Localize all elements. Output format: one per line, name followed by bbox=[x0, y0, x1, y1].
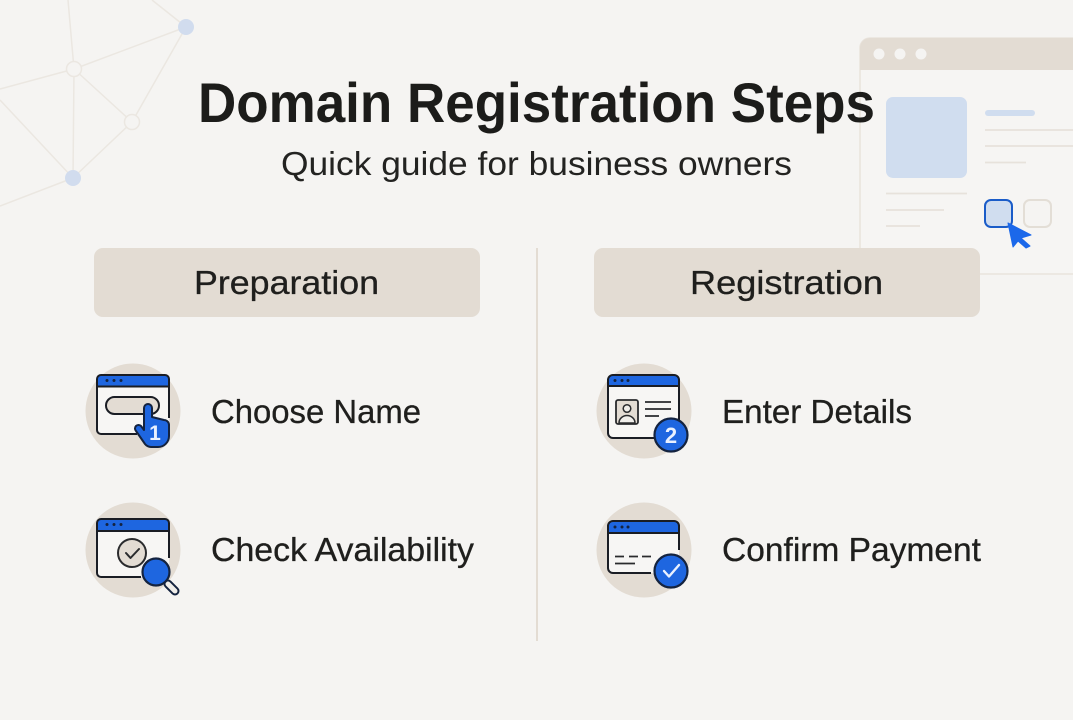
icon: browser with profile card and badge 2 bbox=[596, 364, 692, 458]
title: Domain Registration Steps bbox=[198, 71, 875, 134]
subtitle: Quick guide for business owners bbox=[281, 146, 792, 183]
icon: browser with checkmark badge bbox=[596, 502, 692, 598]
step: Confirm Payment bbox=[596, 502, 981, 598]
panel: registration bbox=[594, 248, 981, 598]
heading: Registration bbox=[594, 248, 980, 317]
heading: Preparation bbox=[94, 248, 480, 317]
step: Check Availability bbox=[86, 502, 475, 598]
heading: Registration: Registration bbox=[690, 264, 883, 301]
label: Confirm Payment: Confirm Payment bbox=[722, 531, 981, 568]
label: Check Availability: Check Availability bbox=[211, 531, 475, 568]
panel: preparation bbox=[86, 248, 480, 598]
label: Enter Details: Enter Details bbox=[722, 393, 912, 430]
label: Choose Name: Choose Name bbox=[211, 393, 421, 430]
icon: browser with magnifier bbox=[86, 502, 180, 598]
step: Enter Details bbox=[596, 364, 912, 458]
icon: browser with profile card and badge 2: 2 bbox=[665, 423, 677, 448]
icon: browser with pointer 1: 1 bbox=[149, 422, 161, 445]
icon: browser with pointer 1 bbox=[86, 364, 180, 458]
step: Choose Name bbox=[86, 364, 421, 458]
column divider bbox=[536, 248, 538, 641]
decorative network graphic bbox=[0, 0, 194, 206]
heading: Preparation: Preparation bbox=[194, 264, 379, 301]
decorative browser window mockup bbox=[860, 38, 1073, 274]
